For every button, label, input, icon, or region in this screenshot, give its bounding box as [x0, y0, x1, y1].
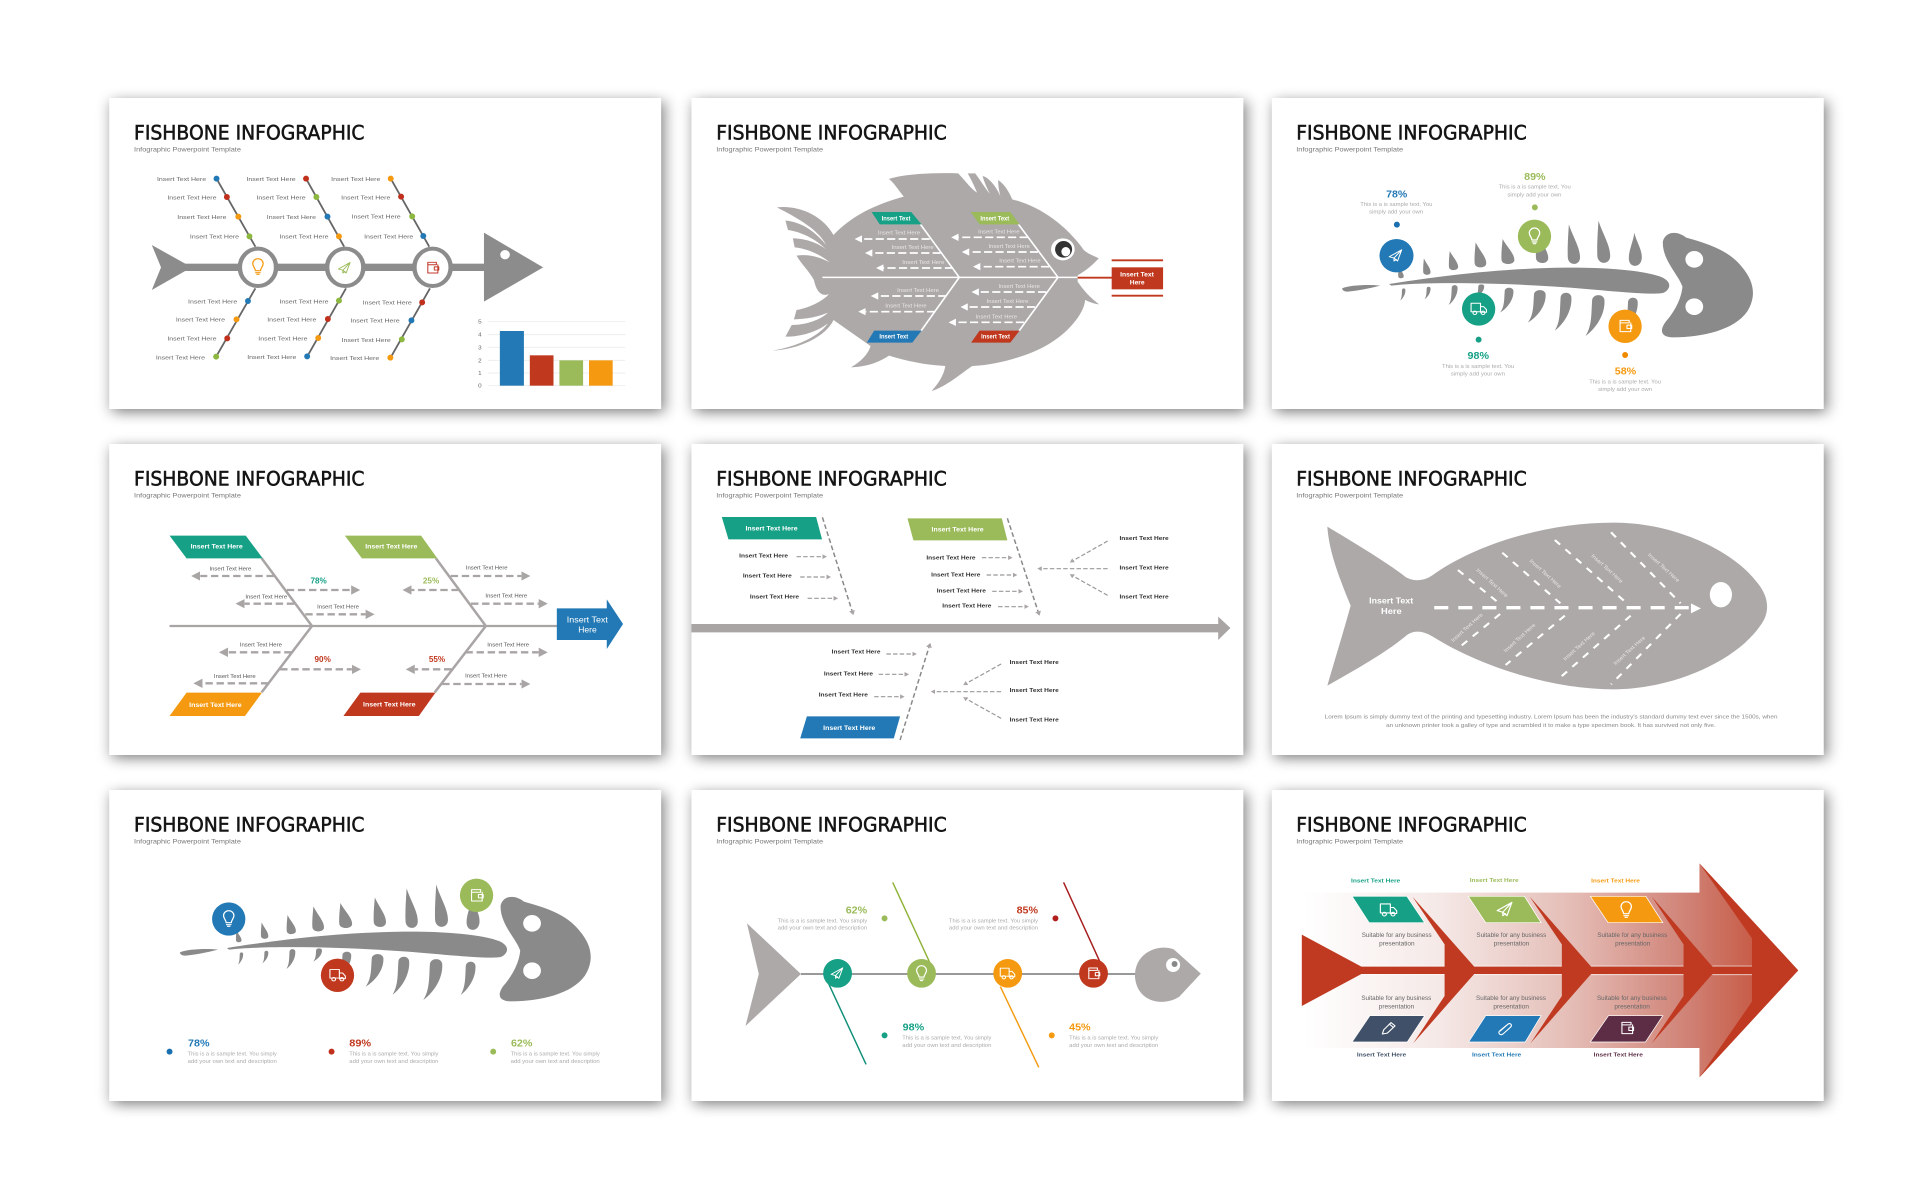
- tab: teal: [170, 536, 263, 558]
- labels: Insert Text Here: [750, 595, 800, 601]
- rotated bone labels: Insert Text Here: [1528, 558, 1562, 590]
- arrow labels: Insert Text Here: [902, 260, 945, 266]
- blue head arrow: [557, 599, 623, 649]
- bone labels: Insert Text Here: [350, 319, 400, 325]
- spine: [801, 971, 1137, 977]
- heading: FISHBONE INFOGRAPHIC: [1296, 121, 1527, 144]
- labels: Insert Text Here: [824, 672, 874, 677]
- tab: navy pencil: [1352, 1016, 1425, 1042]
- tab: red: Insert Text Here: [363, 702, 416, 709]
- callout: 85%: add your own text and description: [949, 926, 1038, 932]
- bar chart: [478, 320, 625, 390]
- red effect box: Here: [1130, 280, 1145, 287]
- callout: 98%: This is a is sample text. You: [1442, 364, 1514, 370]
- callout: 98%: [1442, 337, 1514, 377]
- callout: 78%: 78%: [1386, 189, 1408, 200]
- arrow labels: Insert Text Here: [999, 259, 1041, 265]
- labels: Insert Text Here: [819, 693, 869, 698]
- heading: Infographic Powerpoint Template: [716, 839, 823, 845]
- heading: [1296, 121, 1527, 153]
- percentages: 90%: [315, 654, 331, 664]
- top headings: Insert Text Here: [1470, 878, 1519, 884]
- arrow labels: Insert Text Here: [878, 231, 920, 237]
- heading: FISHBONE INFOGRAPHIC: [134, 467, 364, 490]
- legend: 78%: add your own text and description: [188, 1059, 277, 1065]
- heading: Infographic Powerpoint Template: [134, 147, 241, 153]
- labels: Insert Text Here: [832, 650, 881, 656]
- arrow labels: Insert Text Here: [240, 643, 282, 649]
- rotated bone labels: Insert Text Here: [1646, 552, 1681, 584]
- bone labels: Insert Text Here: [156, 356, 206, 361]
- arrow labels: [878, 230, 1041, 320]
- bone labels: Insert Text Here: [190, 235, 240, 241]
- body paragraph: Lorem Ipsum is simply dummy text of the printing and typesetting industry. Lorem Ipsum has been the industry's standard dummy text ever since the 1500s, when: [1325, 715, 1778, 721]
- tab: orange: [170, 693, 262, 716]
- tab: teal: Insert Text Here: [745, 526, 798, 533]
- legend: 78%: 78%: [188, 1038, 210, 1050]
- callout: 98%: This is a is sample text. You simply: [902, 1036, 992, 1042]
- fish silhouette: [1327, 523, 1767, 689]
- tail label: [1369, 596, 1413, 616]
- main arrow: [691, 617, 1230, 640]
- bar chart: 2: [478, 359, 482, 364]
- tab: blue: [800, 716, 900, 738]
- bone labels: [156, 177, 414, 362]
- labels: Insert Text Here: [1119, 595, 1169, 601]
- tab: green: [907, 518, 1007, 540]
- arrow labels: Insert Text Here: [885, 304, 927, 310]
- percentages: [310, 576, 445, 664]
- heading: FISHBONE INFOGRAPHIC: [716, 121, 947, 144]
- heading: [134, 121, 364, 153]
- callout: 62%: add your own text and description: [778, 926, 867, 932]
- icon ring: wallet: [414, 249, 451, 286]
- bubble: blue bulb: [212, 902, 245, 936]
- bubble: green bulb: [1518, 220, 1551, 253]
- callout: 58%: This is a is sample text. You: [1589, 380, 1661, 386]
- panel: slide 4 fishbone with dashed arrows: [109, 444, 664, 758]
- descriptions: Suitable for any business: [1597, 995, 1667, 1002]
- labels: Insert Text Here: [1119, 566, 1169, 571]
- rotated bone labels: Insert Text Here: [1450, 612, 1485, 644]
- callout: 62%: 62%: [846, 905, 868, 916]
- descriptions: Suitable for any business: [1597, 932, 1667, 939]
- spine and main bones: [170, 558, 559, 692]
- tab: red: [343, 693, 435, 716]
- legend: 89%: 89%: [349, 1038, 372, 1050]
- bone labels: Insert Text Here: [279, 300, 329, 305]
- labels: Insert Text Here: [1010, 688, 1060, 694]
- tail label: Here: [1381, 606, 1402, 616]
- arrow labels: Insert Text Here: [487, 643, 529, 648]
- callout: 45%: 45%: [1069, 1022, 1091, 1034]
- heading: [716, 467, 947, 499]
- tab: green: Insert Text Here: [365, 544, 418, 551]
- node: teal plane: [823, 959, 852, 988]
- tail: [745, 923, 801, 1026]
- callout: 98%: [882, 1022, 992, 1049]
- heading: [716, 813, 947, 845]
- gradient arrow body: [1303, 863, 1798, 1077]
- descriptions: Suitable for any business: [1362, 932, 1432, 939]
- arrow labels: Insert Text Here: [892, 245, 934, 251]
- arrow labels: Insert Text Here: [317, 605, 359, 611]
- legend: 78%: [167, 1038, 277, 1065]
- legend: 62%: add your own text and description: [511, 1059, 600, 1065]
- callout: 58%: simply add your own: [1598, 387, 1652, 393]
- dashed diagonal arrows: [822, 517, 1038, 740]
- arrow labels: Insert Text Here: [465, 674, 507, 679]
- rotated bone labels: Insert Text Here: [1562, 631, 1597, 662]
- panel: slide 3 fish skeleton with callouts: [1272, 98, 1827, 412]
- callout: 89%: This is a is sample text. You: [1499, 185, 1571, 191]
- bone labels: Insert Text Here: [352, 215, 402, 221]
- bubble: blue plane: [1379, 239, 1414, 272]
- heading: FISHBONE INFOGRAPHIC: [1296, 467, 1527, 490]
- heading: [1296, 467, 1527, 499]
- heading: [716, 121, 947, 153]
- spine and tail: [1302, 935, 1755, 1006]
- percentages: 78%: [310, 576, 327, 585]
- body paragraph: [1325, 715, 1778, 729]
- red effect box: Insert Text: [1120, 272, 1155, 279]
- legend: 89%: add your own text and description: [349, 1059, 438, 1065]
- chevrons: [1412, 897, 1712, 1043]
- heading: FISHBONE INFOGRAPHIC: [716, 467, 947, 490]
- labels: Insert Text Here: [931, 573, 981, 579]
- descriptions: presentation: [1493, 1004, 1529, 1011]
- percentages: 55%: [429, 654, 445, 664]
- callout: 98%: add your own text and description: [902, 1043, 991, 1049]
- heading: Infographic Powerpoint Template: [134, 493, 241, 499]
- callout: 58%: [1589, 352, 1661, 393]
- bubble: green wallet: [460, 879, 493, 912]
- blue head arrow: Insert Text: [567, 615, 608, 624]
- arrow labels: Insert Text Here: [485, 594, 527, 599]
- descriptions: presentation: [1379, 941, 1415, 948]
- tab: teal: Insert Text: [882, 216, 911, 223]
- legend: 62%: This is a is sample text. You simply: [511, 1052, 600, 1057]
- bar chart: 1: [478, 371, 482, 377]
- tab: green: [345, 536, 437, 558]
- callout: 89%: 89%: [1524, 171, 1546, 183]
- heading: FISHBONE INFOGRAPHIC: [134, 813, 364, 836]
- callout: 78%: [1360, 189, 1432, 228]
- fish skeleton: [1342, 221, 1753, 337]
- arrow labels: Insert Text Here: [214, 674, 256, 680]
- blue head arrow: Here: [578, 625, 597, 634]
- descriptions: presentation: [1615, 941, 1651, 948]
- white spine and main bones: [822, 224, 1078, 331]
- labels: Insert Text Here: [1010, 660, 1060, 666]
- fish eye: [1051, 238, 1075, 260]
- tab: teal: [872, 212, 922, 224]
- body paragraph: an unknown printer took a galley of type and scrambled it to make a type specimen book. It has survived not only five.: [1386, 723, 1716, 729]
- top headings: Insert Text Here: [1351, 879, 1401, 884]
- bone labels: Insert Text Here: [246, 177, 296, 183]
- bone labels: Insert Text Here: [167, 337, 217, 343]
- bottom headings: Insert Text Here: [1594, 1053, 1644, 1059]
- bar chart: 3: [478, 346, 482, 351]
- descriptions: presentation: [1379, 1004, 1415, 1011]
- icon ring: bulb: [240, 249, 276, 286]
- tail label: Insert Text: [1369, 596, 1413, 606]
- arrow labels: [209, 566, 529, 680]
- percentages: 25%: [423, 576, 439, 585]
- arrow labels: Insert Text Here: [987, 299, 1029, 305]
- heading: FISHBONE INFOGRAPHIC: [134, 121, 364, 144]
- callout: 62%: [778, 905, 888, 932]
- small dashed arrows: [797, 541, 1108, 718]
- bone labels: Insert Text Here: [267, 318, 317, 323]
- heading: Infographic Powerpoint Template: [716, 147, 823, 153]
- labels: [739, 536, 1169, 724]
- arrow labels: Insert Text Here: [978, 230, 1020, 235]
- panel: slide 2 grey fish with white bones: [691, 98, 1246, 412]
- descriptions: Suitable for any business: [1476, 995, 1546, 1002]
- arrow labels: Insert Text Here: [466, 566, 508, 571]
- fish head: [1135, 948, 1201, 1002]
- legend: 62%: [490, 1038, 600, 1065]
- bottom headings: [1357, 1053, 1644, 1059]
- panel: slide 1 numbered arrow fishbone with bar chart: [109, 98, 664, 412]
- callout: 45%: add your own text and description: [1069, 1043, 1158, 1049]
- rotated bone labels: Insert Text Here: [1613, 635, 1647, 667]
- tab: orange bulb: [1590, 896, 1663, 923]
- node: red wallet: [1079, 959, 1108, 988]
- fish skeleton: spine, tail and head: [152, 233, 543, 302]
- descriptions: presentation: [1494, 941, 1530, 948]
- node: green bulb: [907, 959, 936, 988]
- dashed arrows: [200, 576, 539, 684]
- top headings: [1351, 878, 1641, 884]
- descriptions: presentation: [1614, 1004, 1650, 1011]
- red effect box: [1078, 260, 1163, 296]
- callout: 85%: 85%: [1017, 905, 1039, 916]
- bone labels: Insert Text Here: [342, 338, 392, 344]
- tab: red: Insert Text: [981, 334, 1011, 340]
- tab: blue: Insert Text: [879, 334, 909, 340]
- tab: red: [971, 331, 1020, 343]
- heading: Infographic Powerpoint Template: [1296, 493, 1403, 499]
- bone labels: Insert Text Here: [330, 356, 380, 362]
- panel: slide 7 fish skeleton with legend: [109, 790, 664, 1104]
- descriptions: [1361, 932, 1667, 1011]
- labels: Insert Text Here: [739, 554, 789, 559]
- legend: 62%: 62%: [511, 1038, 533, 1050]
- arrow labels: Insert Text Here: [245, 595, 287, 600]
- dashed arrows: [862, 237, 1049, 322]
- icon ring: paper plane: [327, 249, 363, 286]
- tab: blue: [867, 331, 922, 343]
- labels: Insert Text Here: [1010, 718, 1060, 724]
- arrow labels: Insert Text Here: [897, 288, 939, 294]
- heading: Infographic Powerpoint Template: [1296, 147, 1403, 153]
- callout: 85%: [949, 905, 1058, 932]
- diagonal bones: [216, 179, 430, 358]
- callout: 62%: This is a is sample text. You simply: [778, 919, 867, 924]
- rotated bone labels: Insert Text Here: [1474, 568, 1509, 599]
- callout: 45%: This is a is sample text. You simply: [1069, 1036, 1158, 1042]
- tab: blue clip: [1469, 1016, 1541, 1042]
- callout: 78%: This is a is sample text. You: [1360, 202, 1432, 208]
- bone labels: Insert Text Here: [279, 235, 329, 241]
- heading: [1296, 813, 1527, 845]
- labels: Insert Text Here: [942, 604, 992, 610]
- callout: 98%: simply add your own: [1451, 372, 1505, 377]
- dashed white bones: [1458, 532, 1681, 684]
- rotated bone labels: Insert Text Here: [1589, 553, 1624, 585]
- arrow labels: Insert Text Here: [998, 284, 1040, 290]
- fish skeleton: [180, 885, 591, 1001]
- tab: green: [971, 212, 1020, 224]
- tab: green: Insert Text Here: [932, 527, 984, 534]
- legend: 89%: [329, 1038, 439, 1065]
- tab: purple wallet: [1590, 1016, 1663, 1042]
- coloured dots on bones: [213, 176, 426, 361]
- legend: 89%: This is a is sample text. You simply: [349, 1052, 439, 1057]
- heading: [134, 813, 364, 845]
- bottom headings: Insert Text Here: [1357, 1053, 1407, 1059]
- callout: 89%: simply add your own: [1507, 193, 1561, 198]
- bone labels: Insert Text Here: [157, 177, 207, 183]
- heading: Infographic Powerpoint Template: [1296, 839, 1403, 845]
- bone labels: Insert Text Here: [364, 235, 414, 241]
- callout: 78%: simply add your own: [1369, 210, 1423, 216]
- heading: FISHBONE INFOGRAPHIC: [716, 813, 947, 836]
- bone labels: Insert Text Here: [167, 196, 217, 201]
- rotated bone labels: Insert Text Here: [1503, 623, 1537, 654]
- heading: FISHBONE INFOGRAPHIC: [1296, 813, 1527, 836]
- arrow labels: Insert Text Here: [976, 315, 1017, 320]
- coloured bones: [827, 882, 1100, 1067]
- heading: Infographic Powerpoint Template: [716, 493, 823, 499]
- top headings: Insert Text Here: [1591, 879, 1641, 884]
- bone labels: Insert Text Here: [258, 337, 308, 342]
- panel: slide 8 timeline fish: [691, 790, 1246, 1104]
- panel: slide 5 long arrow cause groups: [691, 444, 1246, 758]
- tab: blue: Insert Text Here: [823, 725, 876, 732]
- labels: Insert Text Here: [1119, 536, 1169, 542]
- arrow head rim: [1699, 863, 1798, 1077]
- bone labels: Insert Text Here: [363, 301, 413, 307]
- labels: Insert Text Here: [926, 556, 976, 562]
- callout: 58%: 58%: [1615, 366, 1637, 378]
- bar chart: 0: [478, 384, 482, 390]
- node: orange truck: [993, 959, 1022, 988]
- legend: 78%: This is a is sample text. You simply: [188, 1052, 277, 1057]
- labels: Insert Text Here: [743, 574, 792, 580]
- tab: teal: [722, 517, 822, 539]
- bone labels: Insert Text Here: [176, 318, 226, 324]
- descriptions: Suitable for any business: [1361, 995, 1431, 1002]
- bone labels: Insert Text Here: [247, 355, 297, 361]
- bone labels: Insert Text Here: [177, 215, 227, 221]
- bone labels: Insert Text Here: [331, 177, 381, 183]
- tab: teal: Insert Text Here: [191, 544, 243, 551]
- panel: slide 6 large fish silhouette: [1272, 444, 1827, 758]
- heading: Infographic Powerpoint Template: [134, 839, 241, 845]
- panel: slide 9 red gradient arrow fishbone: [1272, 790, 1827, 1104]
- bone labels: Insert Text Here: [267, 215, 317, 221]
- bar chart: 5: [478, 320, 482, 326]
- dashed white spine: [1434, 603, 1701, 613]
- bubble: orange wallet: [1608, 310, 1642, 343]
- tab: green: Insert Text: [980, 216, 1010, 222]
- bone labels: Insert Text Here: [256, 196, 306, 201]
- callout: 45%: [1049, 1022, 1158, 1049]
- bone labels: Insert Text Here: [188, 300, 238, 305]
- bar chart: 4: [478, 333, 482, 339]
- callout: 89%: [1499, 171, 1571, 210]
- tab: teal truck: [1352, 896, 1425, 923]
- heading: [134, 467, 364, 499]
- arrow labels: Insert Text Here: [988, 244, 1030, 250]
- bubble: teal truck: [1462, 292, 1495, 326]
- bubble: red truck: [321, 959, 354, 992]
- tab: green plane: [1468, 896, 1541, 923]
- fish eye: [1710, 582, 1732, 607]
- callout: 98%: 98%: [903, 1022, 925, 1034]
- descriptions: Suitable for any business: [1476, 932, 1546, 939]
- fish body silhouette: [772, 173, 1099, 391]
- labels: Insert Text Here: [937, 589, 987, 595]
- rotated bone labels: [1450, 552, 1681, 667]
- callout: 98%: 98%: [1468, 350, 1490, 362]
- tab: orange: Insert Text Here: [189, 702, 242, 709]
- arrow labels: Insert Text Here: [209, 567, 251, 572]
- bone labels: Insert Text Here: [341, 196, 391, 201]
- bottom headings: Insert Text Here: [1472, 1053, 1522, 1059]
- callout: 85%: This is a is sample text. You simply: [949, 919, 1038, 924]
